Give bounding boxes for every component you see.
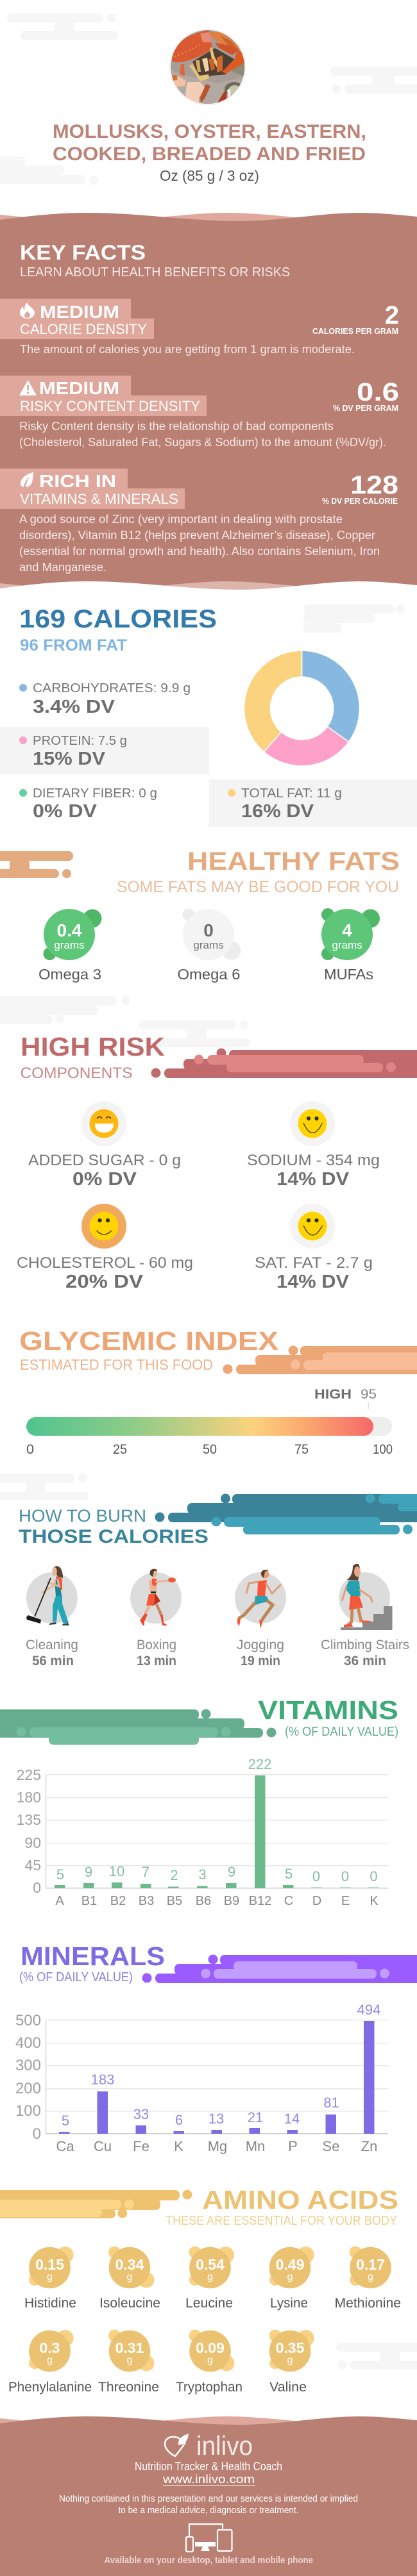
background cloud left [0, 156, 98, 185]
panel: healthy fats [0, 847, 400, 983]
bar chart: minerals: 200 [15, 2080, 41, 2097]
legend: total fat: TOTAL FAT: 11 g [241, 786, 342, 801]
disclaimer: Nothing contained in this presentation and our services is intended or implied [59, 2493, 358, 2504]
gauge scale [26, 1442, 393, 1457]
bar chart: vitamins: D [312, 1894, 321, 1908]
icon: leaf [21, 472, 33, 487]
fact: risky content density: % DV PER GRAM [333, 403, 398, 413]
fact: rich in vitamins and minerals: and Manganese. [19, 561, 106, 574]
title: MOLLUSKS, OYSTER, EASTERN, [53, 121, 366, 142]
icon: mild smile face [90, 1211, 118, 1241]
background cloud amino [336, 2343, 417, 2370]
amino: histidine [24, 2247, 76, 2311]
decoration: green clouds [0, 1709, 276, 1738]
amino: tryptophan [176, 2329, 243, 2395]
activity: climbing stairs: 36 min [344, 1654, 386, 1668]
activity: cleaning: 56 min [32, 1654, 74, 1668]
bar chart: vitamins: B3 [139, 1894, 154, 1908]
bar chart: minerals: 494 [357, 2002, 380, 2018]
bar chart: vitamins: 0 [33, 1879, 41, 1896]
added sugar [28, 1101, 181, 1190]
fact: calorie density: The amount of calories you are getting from 1 gram is moderate. [20, 343, 355, 356]
panel: how to burn those calories [19, 1493, 417, 1668]
sodium [247, 1101, 380, 1190]
amino: phenylalanine: 0.3 [40, 2339, 60, 2356]
healthy fats heading: HEALTHY FATS [187, 847, 400, 876]
amino: isoleucine: g [127, 2272, 132, 2282]
fact: rich in vitamins and minerals: (essential for normal growth and health). Also contains Selenium, Iron [19, 545, 380, 558]
amino: valine [269, 2329, 314, 2395]
bar chart: vitamins [17, 1756, 388, 1908]
bar chart: vitamins: B1 [81, 1894, 97, 1908]
amino: methionine: 0.17 [356, 2256, 385, 2273]
decoration: teal clouds [155, 1493, 417, 1522]
bar chart: vitamins: B12 [249, 1894, 271, 1908]
amino: histidine: g [47, 2272, 53, 2282]
panel: amino acids [0, 2185, 417, 2395]
gauge scale: 75 [294, 1442, 309, 1457]
website link: www.inlivo.com [162, 2473, 255, 2486]
activity: jogging: Jogging [237, 1638, 284, 1652]
figure: woman sweeping [26, 1566, 69, 1625]
fact: calorie density: 2 [385, 301, 399, 329]
bar chart: minerals: 6 [175, 2112, 183, 2128]
amino: lysine: g [287, 2272, 293, 2282]
bar chart: minerals: Zn [361, 2138, 377, 2154]
icon: warning triangle [19, 380, 37, 395]
vitamins heading: VITAMINS [258, 1695, 398, 1725]
mufas: 4 [342, 920, 352, 940]
amino: phenylalanine [8, 2330, 92, 2395]
activity: boxing: 13 min [137, 1654, 176, 1668]
bar chart: vitamins: 0 [341, 1868, 349, 1884]
fact: rich in vitamins and minerals: 128 [350, 471, 398, 499]
bar chart: minerals: 100 [15, 2102, 41, 2120]
fact: calorie density: CALORIE DENSITY [20, 321, 147, 337]
decoration: yellow clouds [0, 2190, 192, 2218]
added sugar: 0% DV [72, 1169, 137, 1190]
gauge scale: 0 [26, 1442, 34, 1457]
glycemic value: HIGH [314, 1387, 352, 1402]
bar chart: vitamins: C [284, 1894, 293, 1908]
omega 6: 0 [203, 920, 214, 940]
glycemic value [314, 1387, 377, 1409]
burn heading: THOSE CALORIES [19, 1526, 208, 1547]
bar chart: vitamins: B2 [110, 1894, 126, 1908]
bar chart: vitamins: 0 [312, 1868, 320, 1884]
key facts heading [20, 241, 290, 279]
amino: isoleucine [99, 2246, 160, 2311]
decoration: light yellow clouds [0, 2200, 134, 2217]
calories from fat: 96 FROM FAT [20, 636, 127, 654]
key facts heading: KEY FACTS [20, 241, 146, 264]
added sugar: ADDED SUGAR - 0 g [28, 1152, 181, 1169]
saturated fat: SAT. FAT - 2.7 g [255, 1254, 373, 1272]
omega 3: grams [54, 939, 85, 951]
decoration: orange clouds [223, 1346, 417, 1374]
amino: leucine: Leucine [185, 2296, 233, 2311]
legend: protein: PROTEIN: 7.5 g [33, 734, 127, 748]
gauge scale: 25 [113, 1442, 127, 1457]
glycemic subheading: ESTIMATED FOR THIS FOOD [20, 1356, 213, 1373]
cholesterol [17, 1204, 193, 1292]
bar chart: minerals: 400 [15, 2034, 41, 2052]
bar chart: vitamins: 90 [24, 1834, 41, 1851]
bar chart: minerals: 14 [284, 2111, 300, 2127]
title: COOKED, BREADED AND FRIED [53, 144, 366, 165]
bar chart: minerals: 81 [323, 2095, 339, 2111]
fact: risky content density: 0.6 [357, 378, 399, 406]
bar chart: vitamins: 3 [198, 1866, 207, 1882]
bar chart: vitamins: 9 [85, 1864, 92, 1880]
bar chart: vitamins: 225 [17, 1766, 41, 1783]
amino: threonine [98, 2329, 159, 2395]
logo: inlivo [165, 2431, 253, 2461]
icon: smile face [298, 1109, 327, 1138]
decoration: light red clouds [194, 1055, 396, 1072]
glycemic value: 95 [361, 1387, 377, 1402]
decoration: red clouds [151, 1049, 417, 1078]
bar chart: minerals: Cu [94, 2138, 112, 2154]
saturated fat [255, 1204, 373, 1292]
bar chart: minerals: 500 [15, 2012, 41, 2029]
bar chart: vitamins: 135 [17, 1811, 41, 1828]
background cloud top left [7, 13, 118, 40]
legend: carbohydrates: CARBOHYDRATES: 9.9 g [33, 681, 191, 695]
fact: calorie density: MEDIUM [40, 302, 119, 322]
amino: lysine [269, 2247, 314, 2311]
amino: valine: Valine [269, 2380, 307, 2395]
disclaimer [59, 2493, 358, 2516]
activity: cleaning [26, 1566, 78, 1668]
panel: vitamins [0, 1695, 398, 1908]
legend: protein: 15% DV [33, 749, 106, 769]
icon: smile face [298, 1211, 327, 1241]
fact: rich in vitamins and minerals: VITAMINS & MINERALS [20, 491, 178, 507]
decoration: light orange clouds [291, 1352, 417, 1370]
legend: carbohydrates: 3.4% DV [33, 697, 115, 717]
bar chart: minerals: 0 [33, 2125, 41, 2143]
vitamins subheading: (% OF DAILY VALUE) [285, 1725, 398, 1739]
bar chart: vitamins: 5 [285, 1866, 293, 1882]
gauge scale: 100 [373, 1442, 393, 1457]
minerals heading: MINERALS [21, 1941, 165, 1971]
bar chart: vitamins: E [341, 1894, 350, 1908]
amino: isoleucine: Isoleucine [99, 2296, 160, 2311]
decoration: light teal clouds [212, 1493, 417, 1534]
amino: isoleucine: 0.34 [115, 2256, 144, 2273]
amino: threonine: 0.31 [115, 2339, 144, 2356]
bar chart: vitamins: 0 [370, 1868, 378, 1884]
bar chart: minerals: 5 [62, 2113, 69, 2129]
amino: valine: g [287, 2355, 293, 2366]
tagline: Nutrition Tracker & Health Coach [135, 2460, 282, 2473]
fact: rich in vitamins and minerals: % DV PER CALORIE [322, 496, 398, 506]
panel: minerals [15, 1941, 417, 2154]
decoration: purple clouds [142, 1955, 417, 1983]
amino: tryptophan: g [207, 2355, 213, 2366]
saturated fat: 14% DV [277, 1272, 350, 1292]
decoration: light purple clouds [201, 1961, 389, 1979]
amino: leucine: 0.54 [196, 2256, 225, 2273]
glycemic heading: GLYCEMIC INDEX [19, 1326, 278, 1356]
amino: leucine [185, 2246, 234, 2311]
cholesterol: 20% DV [65, 1272, 144, 1292]
icon: grin face [90, 1109, 118, 1138]
background cloud top right [330, 67, 417, 94]
omega 3 [38, 909, 101, 983]
figure: woman on stairs [342, 1564, 372, 1627]
omega 6: Omega 6 [177, 966, 240, 983]
decoration: light green clouds [17, 1727, 231, 1745]
bar chart: minerals: P [288, 2138, 298, 2154]
bar chart: minerals: Ca [56, 2138, 74, 2154]
figure: jogger [237, 1570, 281, 1629]
amino: threonine: Threonine [98, 2380, 159, 2395]
amino: histidine: Histidine [24, 2296, 76, 2311]
title [53, 121, 366, 165]
mufas: MUFAs [324, 966, 373, 983]
bar chart: vitamins: B5 [167, 1894, 182, 1908]
fact: rich in vitamins and minerals: disorders), Vitamin B12 (helps prevent Alzheimer’s disease), Copper [19, 529, 375, 542]
amino: leucine: g [207, 2272, 213, 2282]
glycemic gauge [26, 1417, 393, 1436]
burn heading: HOW TO BURN [19, 1506, 146, 1525]
omega 3: Omega 3 [38, 966, 101, 983]
bar chart: vitamins: B6 [196, 1894, 211, 1908]
decoration: orange cloud [0, 851, 73, 878]
icon: flame [20, 303, 35, 319]
activity: jogging [235, 1570, 286, 1668]
amino: histidine: 0.15 [35, 2256, 64, 2273]
background clouds high risk [0, 996, 250, 1047]
omega 6 [177, 909, 241, 983]
legend: dietary fiber: 0% DV [33, 801, 98, 822]
panel: footer [0, 2416, 417, 2576]
icon: devices [186, 2524, 232, 2552]
calories heading: 169 CALORIES [19, 605, 217, 633]
bar chart: vitamins: 7 [142, 1864, 149, 1880]
fact: calorie density: CALORIES PER GRAM [312, 326, 398, 336]
amino: lysine: Lysine [270, 2296, 308, 2311]
bar chart: minerals: 183 [91, 2072, 114, 2088]
amino: lysine: 0.49 [276, 2256, 304, 2273]
disclaimer: to be a medical advice, diagnosis or treatment. [118, 2505, 299, 2516]
amino: threonine: g [127, 2355, 132, 2366]
fact: calorie density [0, 299, 399, 356]
panel: calories [0, 605, 417, 827]
bar chart: vitamins: B9 [224, 1894, 239, 1908]
amino: methionine: g [368, 2272, 373, 2282]
legend: total fat [228, 786, 342, 822]
activity: climbing stairs: Climbing Stairs [321, 1638, 409, 1652]
gauge scale: 50 [203, 1442, 217, 1457]
high risk heading: HIGH RISK [21, 1032, 165, 1061]
omega 6: grams [193, 939, 224, 951]
fact: risky content density: RISKY CONTENT DENSITY [20, 398, 200, 414]
bar chart: minerals: 300 [15, 2057, 41, 2074]
amino acids heading: AMINO ACIDS [202, 2185, 398, 2215]
bar chart: minerals: Fe [133, 2138, 149, 2154]
high risk subheading: COMPONENTS [21, 1065, 132, 1082]
food photo: seafood on ice [168, 28, 248, 108]
bar chart: vitamins: 5 [56, 1866, 64, 1882]
background cloud calories [303, 604, 405, 633]
cholesterol: CHOLESTEROL - 60 mg [17, 1254, 193, 1272]
sodium: SODIUM - 354 mg [247, 1152, 380, 1169]
burn heading [19, 1506, 208, 1547]
omega 3: 0.4 [57, 920, 82, 940]
fact: risky content density: MEDIUM [39, 378, 119, 398]
amino: phenylalanine: g [47, 2355, 53, 2366]
sodium: 14% DV [277, 1169, 350, 1190]
mufas [321, 908, 380, 983]
amino: tryptophan: Tryptophan [176, 2380, 243, 2395]
bar chart: vitamins: 45 [24, 1857, 41, 1874]
figure: boxer [140, 1568, 176, 1625]
bar chart: vitamins: A [55, 1894, 64, 1908]
availability note: Available on your desktop, tablet and mobile phone [104, 2555, 313, 2566]
serving size: Oz (85 g / 3 oz) [160, 167, 259, 184]
amino: phenylalanine: Phenylalanine [8, 2380, 92, 2395]
fact: rich in vitamins and minerals [0, 469, 398, 574]
activity: cleaning: Cleaning [26, 1638, 78, 1652]
bar chart: vitamins: K [370, 1894, 379, 1908]
background cloud burn [0, 1474, 89, 1500]
legend: carbohydrates [19, 681, 191, 717]
activity: boxing [130, 1568, 182, 1668]
amino: methionine: Methionine [335, 2296, 401, 2311]
bar chart: minerals: 13 [208, 2111, 224, 2127]
logo: inlivo: inlivo [196, 2431, 253, 2461]
bar chart: minerals: K [174, 2138, 183, 2154]
activity: climbing stairs [321, 1564, 409, 1668]
icon: stairs [341, 1606, 393, 1630]
bar chart: vitamins: 10 [109, 1863, 124, 1879]
fact: risky content density [0, 376, 399, 449]
legend: protein [19, 734, 127, 769]
legend: total fat: 16% DV [241, 801, 314, 822]
key facts heading: LEARN ABOUT HEALTH BENEFITS OR RISKS [20, 265, 290, 279]
healthy fats subheading: SOME FATS MAY BE GOOD FOR YOU [117, 878, 399, 896]
minerals subheading: (% OF DAILY VALUE) [19, 1970, 133, 1984]
mufas: grams [332, 939, 362, 951]
panel: key facts [0, 213, 417, 602]
fact: rich in vitamins and minerals: A good source of Zinc (very important in dealing with prostate [19, 513, 343, 526]
panel: high risk components [17, 1032, 417, 1292]
bar chart: vitamins: 2 [170, 1867, 178, 1883]
bar chart: minerals: 33 [133, 2106, 149, 2122]
bar chart: minerals: Mg [208, 2138, 227, 2154]
bar chart: minerals: 21 [248, 2109, 263, 2125]
bar chart: minerals [15, 2002, 388, 2154]
bar chart: vitamins: 180 [17, 1789, 41, 1806]
bar chart: vitamins: 222 [248, 1756, 271, 1772]
legend: dietary fiber [19, 786, 157, 822]
bar chart: minerals: Mn [246, 2138, 265, 2154]
activity: jogging: 19 min [241, 1654, 280, 1668]
amino acids subheading: THESE ARE ESSENTIAL FOR YOUR BODY [166, 2214, 397, 2228]
fact: risky content density: (Cholesterol, Saturated Fat, Sugars & Sodium) to the amount (%DV/gr). [19, 436, 386, 449]
activity: boxing: Boxing [137, 1638, 176, 1652]
fact: risky content density: Risky Content density is the relationship of bad components [19, 420, 334, 433]
bar chart: vitamins: 9 [228, 1864, 235, 1880]
amino: valine: 0.35 [276, 2339, 305, 2356]
amino: tryptophan: 0.09 [196, 2339, 225, 2356]
legend: dietary fiber: DIETARY FIBER: 0 g [33, 786, 157, 801]
bar chart: minerals: Se [323, 2138, 339, 2154]
amino: methionine [335, 2246, 401, 2311]
panel: glycemic index [19, 1326, 417, 1457]
fact: rich in vitamins and minerals: RICH IN [39, 471, 116, 491]
donut chart [244, 651, 359, 766]
